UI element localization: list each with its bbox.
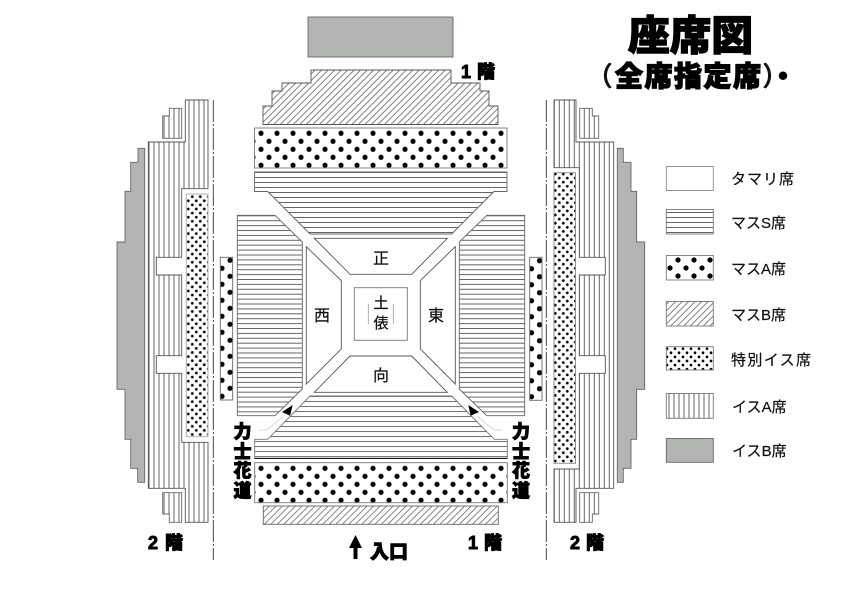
- panel: west chair A: [148, 100, 208, 522]
- legend: chair A: イスA席: [732, 399, 787, 416]
- title: ・: [770, 62, 796, 92]
- panel: bottom mass B: [263, 506, 498, 524]
- label: 1st floor top: 1 階: [461, 62, 495, 82]
- legend: mass S: マスS席: [731, 215, 786, 232]
- panel: bottom mass A: [255, 463, 507, 503]
- panel: east mass S: [459, 215, 525, 416]
- panel: tamari seats east: [420, 247, 455, 384]
- panel: tamari seats south: 向: [373, 367, 389, 385]
- title: ）: [762, 62, 789, 92]
- legend: chair B: [666, 438, 787, 462]
- label: entrance: 入口: [370, 542, 408, 563]
- panel: east chair A small lower: [580, 493, 599, 522]
- legend: special chair: [666, 347, 811, 370]
- ring: dohyo: 土: [373, 295, 389, 312]
- legend: special chair: 特別イス席: [731, 352, 811, 369]
- label: left hanamichi: 力: [234, 422, 252, 442]
- label: left hanamichi: [234, 422, 252, 501]
- label: right hanamichi: 力: [512, 422, 530, 442]
- panel: west mass S: [237, 215, 302, 416]
- label: left hanamichi: 道: [234, 480, 252, 501]
- divider: left 2F boundary: [212, 100, 214, 560]
- panel: east chair B: [617, 148, 645, 482]
- panel: east chair A small upper: [580, 108, 599, 138]
- panel: west chair B: [117, 148, 145, 482]
- arrow: right hanamichi: [468, 405, 502, 430]
- panel: west chair A small lower: [163, 493, 182, 522]
- legend: tamari: [666, 166, 794, 190]
- label: right hanamichi: 花: [512, 460, 530, 481]
- arrow: left hanamichi: [259, 405, 293, 430]
- label: 1st floor bottom: 1 階: [468, 533, 502, 553]
- panel: tamari seats north: [314, 238, 447, 274]
- panel: west special chair: [186, 194, 208, 437]
- label: left hanamichi: 花: [234, 460, 252, 481]
- legend: tamari: タマリ席: [731, 171, 794, 188]
- title: 座席図: [628, 13, 753, 59]
- panel: east mass A: [530, 257, 542, 400]
- title: [586, 13, 796, 92]
- panel: west chair A small upper: [163, 108, 182, 138]
- panel: east chair A: [554, 100, 614, 522]
- label: right hanamichi: 士: [512, 442, 530, 462]
- panel: tamari seats south: [314, 356, 447, 392]
- label: right hanamichi: [512, 422, 530, 501]
- legend: [666, 166, 811, 462]
- ring: dohyo: [354, 288, 407, 340]
- panel: east special chair: [554, 173, 576, 463]
- label: left hanamichi: 士: [234, 442, 252, 462]
- panel: tamari seats north: 正: [373, 251, 389, 268]
- panel: top chair B block: [308, 17, 453, 57]
- legend: mass A: [666, 256, 786, 280]
- panel: tamari seats east: 東: [428, 307, 444, 325]
- arrow: entrance: [349, 535, 362, 559]
- label: 2nd floor right: 2 階: [570, 533, 604, 553]
- panel: tamari seats west: 西: [314, 308, 330, 325]
- panel: west mass A: [220, 257, 233, 400]
- legend: mass A: マスA席: [731, 261, 786, 278]
- panel: top mass A: [254, 128, 507, 168]
- legend: mass B: [666, 302, 786, 326]
- panel: top mass S: [254, 172, 507, 234]
- panel: top mass B: [263, 70, 498, 124]
- title: 全席指定席: [615, 61, 761, 92]
- panel: tamari seats west: [306, 247, 341, 384]
- label: right hanamichi: 道: [512, 480, 530, 501]
- legend: chair B: イスB席: [732, 443, 787, 460]
- legend: mass S: [666, 210, 786, 234]
- ring: dohyo: 俵: [373, 315, 389, 332]
- label: 2nd floor left: 2 階: [148, 533, 183, 553]
- legend: chair A: [666, 394, 787, 418]
- legend: mass B: マスB席: [731, 307, 786, 324]
- divider: right 2F boundary: [545, 100, 547, 560]
- title: （: [586, 62, 613, 92]
- panel: bottom mass S: [255, 396, 507, 458]
